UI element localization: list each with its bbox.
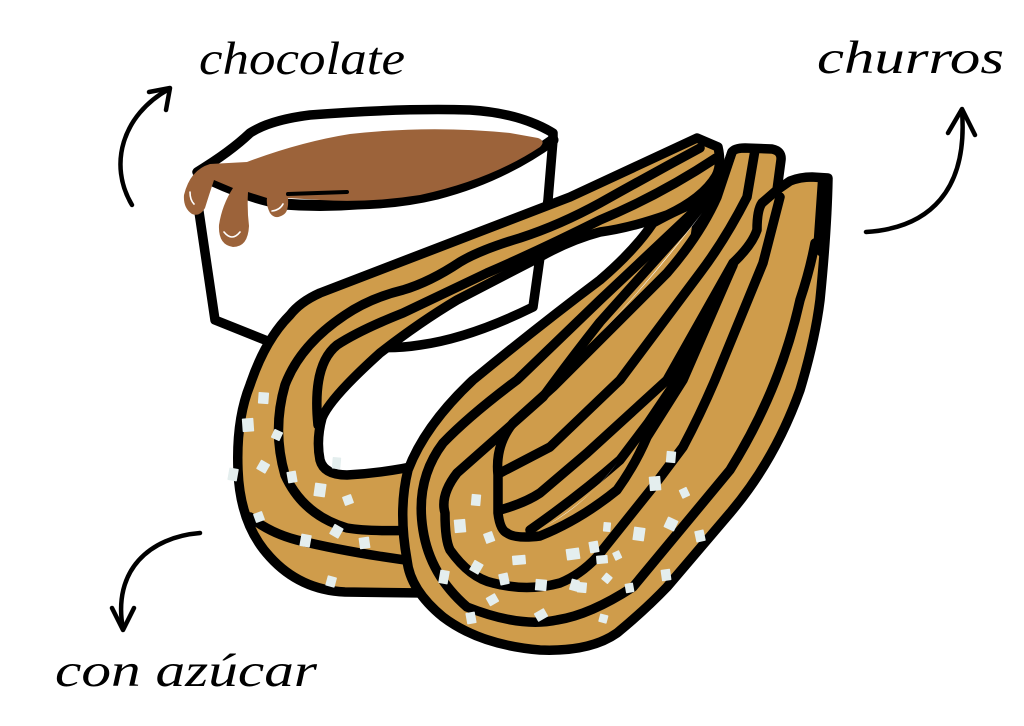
white gaps between strands — [546, 213, 702, 526]
drip highlights — [190, 192, 283, 237]
bowl front rim — [213, 140, 553, 206]
arrow: to sugar — [112, 533, 200, 630]
sauce shadow line — [288, 192, 347, 194]
right churro — [403, 148, 831, 650]
bowl of chocolate — [184, 110, 553, 348]
left churro — [238, 138, 720, 593]
arrow: to churros — [866, 109, 975, 232]
right churro grooves — [421, 203, 815, 622]
label: churros: churros — [817, 32, 1004, 84]
chocolate sauce — [184, 129, 543, 247]
left churro groove lines — [278, 148, 700, 531]
black thick edges — [690, 170, 831, 260]
left churro body — [238, 138, 720, 593]
arrow: to chocolate — [120, 88, 170, 205]
sugar flakes — [228, 393, 705, 624]
label: con azúcar: con azúcar — [55, 645, 318, 697]
label: chocolate: chocolate — [199, 33, 405, 85]
bowl outline — [197, 110, 553, 348]
right churro body — [403, 148, 828, 650]
